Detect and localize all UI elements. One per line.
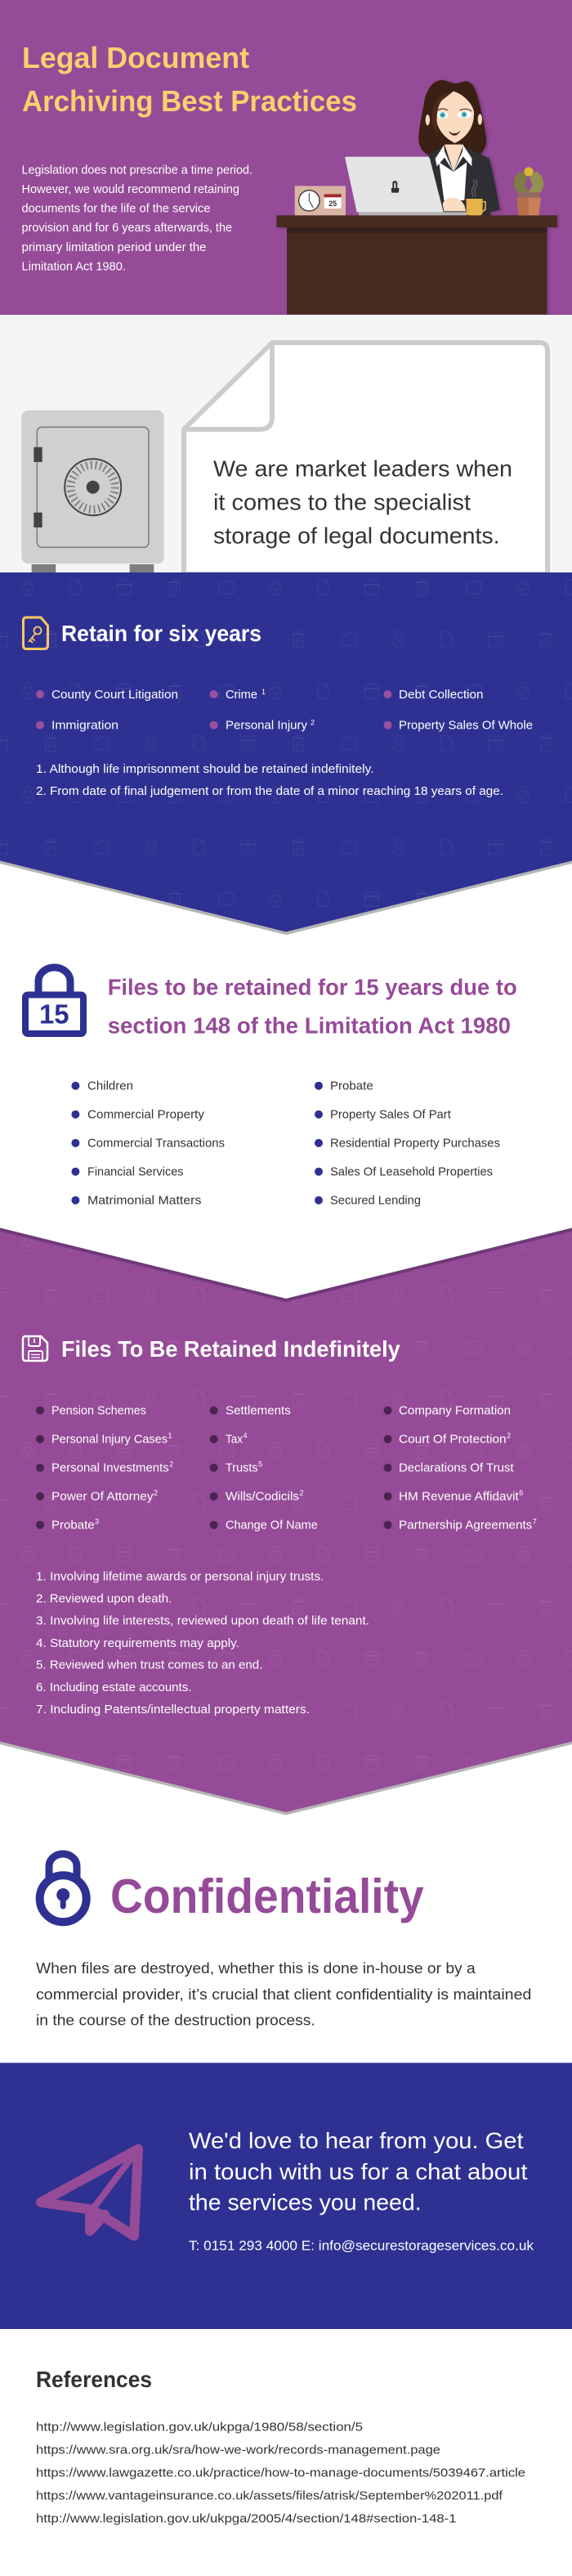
icon: document with key (23, 617, 47, 649)
panel: hero (0, 0, 572, 315)
text block: in the course of the destruction process. (36, 2013, 315, 2029)
intro text: documents for the life of the service (21, 203, 211, 216)
footnotes: indefinite: 1. Involving lifetime awards or personal injury trusts. (36, 1571, 324, 1584)
list: indefinite files: Wills/Codicils (226, 1491, 299, 1504)
footnotes: indefinite: 7. Including Patents/intellectual property matters. (36, 1703, 310, 1717)
icon: folded page (184, 343, 547, 574)
list: fifteen year files: Children (87, 1080, 133, 1093)
list: fifteen year files: Matrimonial Matters (87, 1195, 201, 1208)
list: indefinite files (36, 1405, 537, 1533)
icon: clock and calendar (295, 186, 346, 215)
icon: woman (418, 80, 500, 215)
text: market leaders statement: storage of legal documents. (213, 523, 500, 548)
text: call to action: the services you need. (189, 2190, 422, 2215)
icon: laptop (345, 157, 467, 215)
title: Archiving Best Practices (22, 84, 357, 118)
list: indefinite files: Power Of Attorney (51, 1491, 154, 1504)
icon: desk (276, 215, 557, 314)
list: six year files: Crime (226, 689, 257, 702)
icon: padlock with 15 (25, 967, 83, 1034)
list: indefinite files: 7 (533, 1518, 537, 1526)
list: fifteen year files: Residential Property Purchases (330, 1138, 500, 1151)
panel: fifteen years (25, 967, 517, 1208)
text: market leaders statement: We are market leaders when (213, 456, 512, 482)
list: fifteen year files (71, 1080, 500, 1208)
panel: retained indefinitely (0, 1228, 572, 1815)
list: indefinite files: 3 (95, 1518, 99, 1526)
footnotes: indefinite: 3. Involving life interests, reviewed upon death of life tenant. (36, 1615, 369, 1628)
footnotes: six years: 1. Although life imprisonment should be retained indefinitely. (36, 763, 374, 776)
icon: coffee cup (467, 179, 485, 215)
list: indefinite files: 2 (507, 1432, 511, 1440)
list: fifteen year files: Property Sales Of Part (330, 1109, 451, 1122)
icon: paper plane (41, 2149, 138, 2236)
intro text: provision and for 6 years afterwards, the (21, 222, 232, 235)
intro text: However, we would recommend retaining (21, 183, 239, 196)
list: indefinite files: 2 (169, 1461, 173, 1469)
list: indefinite files: Declarations Of Trust (399, 1462, 514, 1475)
text: market leaders statement (213, 456, 512, 548)
icon: safe (21, 411, 164, 572)
list: fifteen year files: Commercial Transactions (87, 1138, 225, 1151)
list: indefinite files: Personal Investments (51, 1462, 169, 1475)
panel: contact (0, 2062, 572, 2329)
list: six year files (36, 688, 533, 733)
text: call to action: in touch with us for a chat about (189, 2159, 528, 2184)
icon: plant (514, 167, 543, 215)
list: fifteen year files: Financial Services (87, 1166, 183, 1179)
text: call to action (189, 2128, 528, 2215)
list: indefinite files: 2 (154, 1489, 158, 1497)
list: indefinite files: Tax (226, 1434, 244, 1447)
icon: padlock with 15: 15 (39, 999, 69, 1030)
heading: Files to be retained for 15 years due to (108, 975, 517, 1000)
text block (36, 1960, 531, 2029)
footnotes: six years: 2. From date of final judgement or from the date of a minor reaching 18 years of age. (36, 785, 503, 798)
list: six year files: Property Sales Of Whole (399, 720, 533, 733)
intro text (21, 164, 252, 274)
list: indefinite files: 4 (244, 1432, 248, 1440)
list: indefinite files: Court Of Protection (399, 1434, 507, 1447)
icon: floppy disk (23, 1336, 47, 1361)
intro text: Legislation does not prescribe a time period. (21, 164, 252, 177)
list: six year files: Personal Injury (226, 720, 308, 733)
illustration: woman at desk (276, 80, 557, 314)
icon: clock and calendar: 25 (328, 200, 337, 208)
heading (108, 975, 517, 1038)
list: six year files: Immigration (51, 720, 118, 733)
list: indefinite files: 6 (519, 1489, 523, 1497)
list: reference URLs: http://www.legislation.gov.uk/ukpga/2005/4/section/148#section-148-1 (36, 2512, 456, 2526)
heading: section 148 of the Limitation Act 1980 (108, 1012, 511, 1038)
list: six year files: County Court Litigation (51, 689, 178, 702)
list: indefinite files: Partnership Agreements (399, 1519, 532, 1533)
list: indefinite files: Settlements (226, 1405, 291, 1418)
text block: commercial provider, it’s crucial that client confidentiality is maintained (36, 1986, 531, 2003)
footnotes: indefinite: 2. Reviewed upon death. (36, 1593, 172, 1606)
text: market leaders statement: it comes to the specialist (213, 489, 471, 514)
list: fifteen year files: Probate (330, 1080, 373, 1093)
footnotes: indefinite: 4. Statutory requirements may apply. (36, 1637, 239, 1650)
list: reference URLs: https://www.lawgazette.co.uk/practice/how-to-manage-documents/5039467.article (36, 2466, 525, 2480)
footnotes: indefinite: 6. Including estate accounts. (36, 1681, 191, 1694)
list: indefinite files: Company Formation (399, 1405, 511, 1418)
list: reference URLs (36, 2421, 525, 2526)
title (22, 41, 357, 118)
panel: references (36, 2367, 525, 2526)
heading: Retain for six years (61, 621, 261, 646)
list: indefinite files: HM Revenue Affidavit (399, 1491, 519, 1504)
footnotes: indefinite: 5. Reviewed when trust comes to an end. (36, 1659, 262, 1672)
list: fifteen year files: Sales Of Leasehold Properties (330, 1166, 493, 1179)
list: indefinite files: Probate (51, 1519, 95, 1533)
list: six year files: 1 (261, 688, 266, 696)
list: indefinite files: 2 (299, 1489, 304, 1497)
list: six year files: 2 (311, 719, 315, 727)
footnotes: indefinite (36, 1571, 369, 1717)
panel: confidentiality (36, 1854, 531, 2029)
list: reference URLs: http://www.legislation.gov.uk/ukpga/1980/58/section/5 (36, 2421, 363, 2435)
list: indefinite files: 1 (168, 1432, 172, 1440)
list: indefinite files: Trusts (226, 1462, 258, 1475)
text: contact details: T: 0151 293 4000 E: info@securestorageservices.co.uk (189, 2238, 534, 2254)
title: Legal Document (22, 41, 249, 74)
list: indefinite files: Personal Injury Cases (51, 1434, 168, 1447)
list: indefinite files: 5 (258, 1461, 262, 1469)
list: indefinite files: Change Of Name (226, 1519, 318, 1533)
panel: market leaders (0, 315, 572, 574)
list: six year files: Debt Collection (399, 689, 484, 702)
list: fifteen year files: Secured Lending (330, 1195, 421, 1208)
heading: References (36, 2367, 152, 2392)
text: call to action: We'd love to hear from you. Get (189, 2128, 524, 2153)
heading: Confidentiality (110, 1869, 424, 1923)
heading: Files To Be Retained Indefinitely (61, 1336, 400, 1362)
list: reference URLs: https://www.sra.org.uk/sra/how-we-work/records-management.page (36, 2444, 440, 2457)
intro text: Limitation Act 1980. (21, 261, 126, 274)
list: indefinite files: Pension Schemes (51, 1405, 146, 1418)
text block: When files are destroyed, whether this is done in-house or by a (36, 1960, 476, 1977)
footnotes: six years (36, 763, 503, 798)
icon: padlock (40, 1854, 87, 1922)
panel: retain for six years (0, 572, 572, 935)
intro text: primary limitation period under the (21, 241, 206, 254)
list: reference URLs: https://www.vantageinsurance.co.uk/assets/files/atrisk/September%202011.pdf (36, 2489, 503, 2503)
list: fifteen year files: Commercial Property (87, 1109, 205, 1122)
